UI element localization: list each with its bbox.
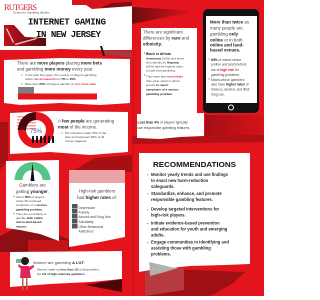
panel text: race and ethnicity: who identify as Hispanic [146,60,180,64]
panel text: younger gamblers: They are more likely to [16,212,47,216]
decorative torn band under title [100,46,132,58]
panel text: race and ethnicity: than other racial or ethnic [146,79,180,83]
panel text: phone: 64% of mixed-venue [211,58,241,62]
panel text: phone: (online and land) bettors [211,62,247,66]
panel text: phone [208,20,250,96]
gauge icon [14,162,50,181]
panel text: phone: many people are [210,26,243,30]
panel: less than 4%: use responsible gambling features. [138,126,190,130]
decorative shape bottom right [145,260,245,296]
panel text: race and ethnicity: (60%) had the highest rates [146,64,183,68]
panel text: more players [17,60,103,86]
recommendations list: high-risk players. [151,212,186,218]
list of conditions: Alcohol and Drug Use [78,215,111,219]
logo: Rutgers [4,3,50,14]
panel text: phone: tobacco, alcohol, and illicit [211,88,249,92]
recommendations list: safeguards. [151,184,175,189]
recommendations list: problems. [151,252,171,256]
list of conditions: Depression [78,206,95,210]
panel: few people [10,111,128,155]
panel text: women: Women are gambling A LOT. [33,260,85,265]
panel text: race and ethnicity: symptoms of a serious [146,88,179,92]
panel text: phone: are at high risk for [211,68,240,72]
panel text: few people [58,118,115,143]
panel: high-risk gamblers [69,170,125,247]
list of conditions: Anxiety [78,210,90,214]
recommendations list: adults. [151,232,164,238]
donut chart: 75% [30,129,43,135]
bar chart [18,87,97,100]
panel text: phone: More than twice as [210,20,250,24]
panel text: younger gamblers: and in land-based [16,220,42,224]
panel: less than 4%: Less than 4% of players typically [138,120,188,124]
panel text: phone: online or in both [210,38,243,42]
panel: race and ethnicity [141,28,197,116]
panel text: more players: There are more players placing more bets [17,60,103,66]
panel text: younger gamblers: gambling problem. [16,208,43,212]
recommendations list: Standardize, enhance, and promote [151,191,222,196]
panel text: women: but 1/2 of high-intensity gamblers [37,272,85,276]
panel text: race and ethnicity: They were also more likely [146,74,183,78]
panel text: phone: online and land- [210,42,244,48]
recommendations list: - [147,191,149,196]
decorative shoe shape left [4,25,46,46]
panel text: more players: More than 25% of players gamble on 3 or more sites [25,82,97,86]
panel text: race and ethnicity: There are significant [143,30,184,34]
recommendations list: Initiate evidence-based prevention [151,220,220,226]
recommendations list: - [147,172,149,177]
panel: less than 4% [137,113,204,139]
panel text: race and ethnicity: groups to report [146,83,168,87]
panel text: high-risk heading: had higher rates of: [77,195,117,200]
panel text: few people: A few people are generating [58,118,115,124]
panel text: more players: and gambling more money every year. [17,66,93,72]
panel: younger gamblers [6,160,59,241]
panel text: younger gamblers: under 35 endorsed [16,199,42,203]
panel text: few people: bets and represent 60% of all [65,135,104,139]
logo: Rutgers: Center for Gambling Studies [13,10,50,14]
panel text: younger gamblers [14,182,49,228]
recommendations list: Monitor yearly trends and use findings [151,172,229,177]
panel text: phone: gambling problems. [211,73,240,77]
people icons [32,136,54,143]
title [28,18,106,40]
logo: Rutgers: RUTGERS [4,3,37,12]
panel text: younger gamblers: About 50% of players [16,195,45,199]
title: INTERNET GAMING [28,18,106,28]
recommendations list: - [147,240,149,244]
recommendations list: to enact new harm-reduction [151,178,209,183]
recommendations list: and education for youth and emerging [151,226,228,232]
decorative top banner shape [72,0,132,9]
panel: more players [4,58,130,105]
panel text: race and ethnicity: differences by race and [143,36,190,40]
panel text: phone: drug use. [211,92,225,96]
panel: phone [203,9,259,113]
panel text: race and ethnicity: gambling problem. [146,92,173,96]
list of conditions [78,206,111,234]
icon: woman figure [16,257,34,290]
recommendations list: Engage communities in identifying and [151,240,229,244]
list of conditions: Other Behavioral [78,225,104,229]
panel text: high-risk heading [77,188,117,200]
panel text: younger gamblers: Gamblers are [19,182,46,188]
panel text: race and ethnicity: ethnicity. [143,42,162,46]
panel text: more players: online has increased from 7% to 25% [25,77,76,81]
list of conditions: Suicidality [78,220,94,224]
panel text: phone: Mixed-venue gamblers [211,78,245,82]
recommendations list: - [147,220,149,226]
panel text: more players: In the past five years, the number of players gambling [25,73,97,77]
panel text: phone: also have higher rates of [211,82,249,86]
panel text: women [33,260,100,276]
panel text: few people: most of the income. [58,124,97,130]
panel text: race and ethnicity: Black or African [146,52,171,56]
panel text: younger gamblers: venues. [16,224,27,228]
heading: recommendations: RECOMMENDATIONS [153,160,236,169]
panel: recommendations [139,153,250,272]
list of conditions: Addictions [78,230,94,234]
decorative top cone [132,7,198,24]
recommendations list: responsible gambling features. [151,197,213,202]
panel text: phone: based venues. [210,48,240,52]
panel text: younger gamblers: getting younger. [16,189,49,194]
panel text: race and ethnicity: of past-year gambling. [146,68,176,72]
panel text: high-risk heading: High-risk gamblers [79,188,116,194]
recommendations list: assisting those with gambling [151,246,211,250]
panel text: younger gamblers: symptoms of a serious [16,203,47,207]
panel text: women: Women make up less than 1/3 of all gamblers, [37,268,100,272]
panel text: race and ethnicity [143,30,190,96]
recommendations list: Develop targeted interventions for [151,206,220,212]
panel text: few people: money wagered [65,139,87,143]
panel: women [10,251,122,292]
panel text: race and ethnicity: Americans (63%) and those [146,56,185,60]
panel text: phone: gambling only [210,32,239,36]
title: IN NEW JERSEY [36,30,102,40]
recommendations list [147,172,229,256]
panel text: younger gamblers: gamble both online [16,216,43,220]
checklist icons [72,204,78,228]
recommendations list: - [147,206,149,212]
panel text: few people: 5% of bettors made 75% of the [65,131,107,135]
